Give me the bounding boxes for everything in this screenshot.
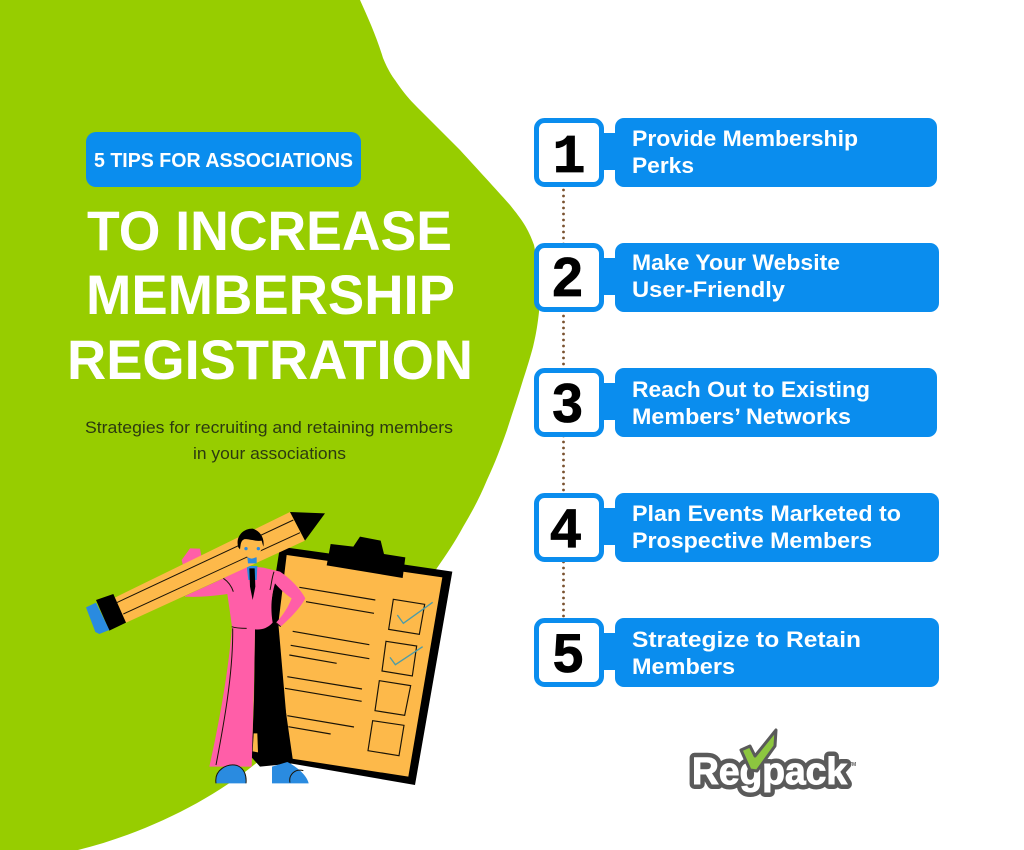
step 1 <box>536 118 937 189</box>
timeline dotted connector <box>562 190 565 618</box>
icon: pencil <box>86 512 325 634</box>
icon: logo check mark <box>741 730 776 771</box>
Regpack logo <box>692 730 856 793</box>
subtitle badge: 5 TIPS FOR ASSOCIATIONS <box>94 150 353 172</box>
Regpack logo: Regpack <box>692 751 848 793</box>
description text: Strategies for recruiting and retaining members <box>85 419 453 437</box>
step 2: Make Your Website <box>632 250 840 275</box>
Regpack logo: Regpack <box>692 751 848 793</box>
step 1: Perks <box>632 153 694 178</box>
step 4: 4 <box>550 497 581 559</box>
subtitle badge <box>86 132 361 187</box>
step 2: 2 <box>552 246 583 308</box>
description text <box>85 419 453 463</box>
step 1: 1 <box>552 126 586 189</box>
step 2: User-Friendly <box>632 277 786 302</box>
icon: clipboard <box>252 537 452 785</box>
title: TO INCREASE <box>87 199 452 262</box>
title: REGISTRATION <box>67 328 473 391</box>
step 2 <box>536 243 939 312</box>
step 5 <box>536 618 939 687</box>
step 5: Members <box>632 654 735 679</box>
step 5: 5 <box>553 622 583 684</box>
title: MEMBERSHIP <box>86 263 455 326</box>
step 4: Plan Events Marketed to <box>632 501 901 526</box>
step 3: Reach Out to Existing <box>632 377 870 402</box>
green background blob <box>0 0 540 850</box>
figure: person legs and body <box>185 566 309 783</box>
step 3: Members’ Networks <box>632 404 851 429</box>
step 1: Provide Membership <box>632 126 858 151</box>
step 3: 3 <box>552 372 583 434</box>
step 4: Prospective Members <box>632 528 872 553</box>
step 4 <box>536 493 939 562</box>
figure: person head <box>238 529 264 563</box>
step 3 <box>536 368 937 437</box>
step 5: Strategize to Retain <box>632 627 861 652</box>
title <box>67 199 473 391</box>
description text: in your associations <box>193 445 346 463</box>
Regpack logo: TM <box>849 762 856 768</box>
illustration: person with pencil and clipboard <box>86 512 452 785</box>
